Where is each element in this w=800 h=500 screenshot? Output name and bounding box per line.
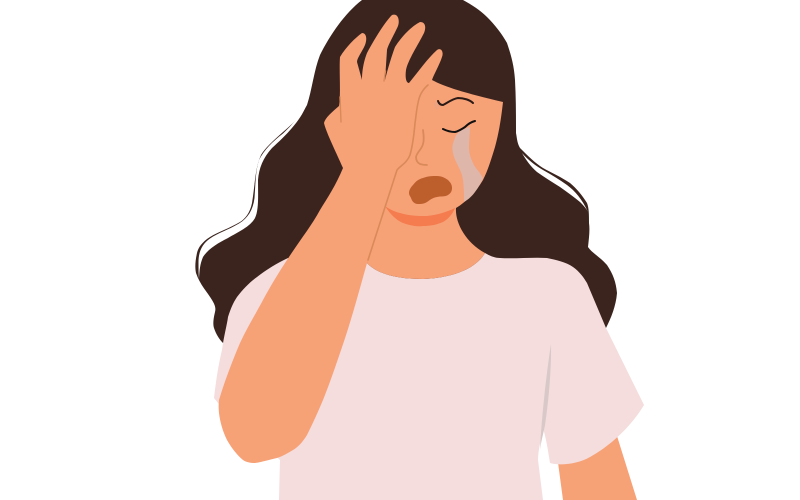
eyebrow: [438, 98, 473, 105]
forearm and hand: [219, 15, 443, 463]
back arm: [555, 420, 637, 500]
hair: [195, 0, 617, 420]
hand and face edge line: [368, 85, 428, 260]
mouth: [409, 176, 452, 204]
finger crease: [340, 71, 386, 122]
hair highlight: left: [198, 106, 306, 279]
face details: [385, 98, 483, 226]
t-shirt: [214, 253, 644, 500]
hair highlight: right: [522, 153, 588, 212]
head and neck skin: [367, 70, 503, 279]
tear: [452, 127, 483, 202]
chin shadow: [385, 206, 455, 226]
forehead wrinkle: [434, 102, 439, 109]
shirt fold: [540, 344, 551, 450]
nose: [416, 130, 427, 165]
closed eye: [443, 121, 475, 132]
